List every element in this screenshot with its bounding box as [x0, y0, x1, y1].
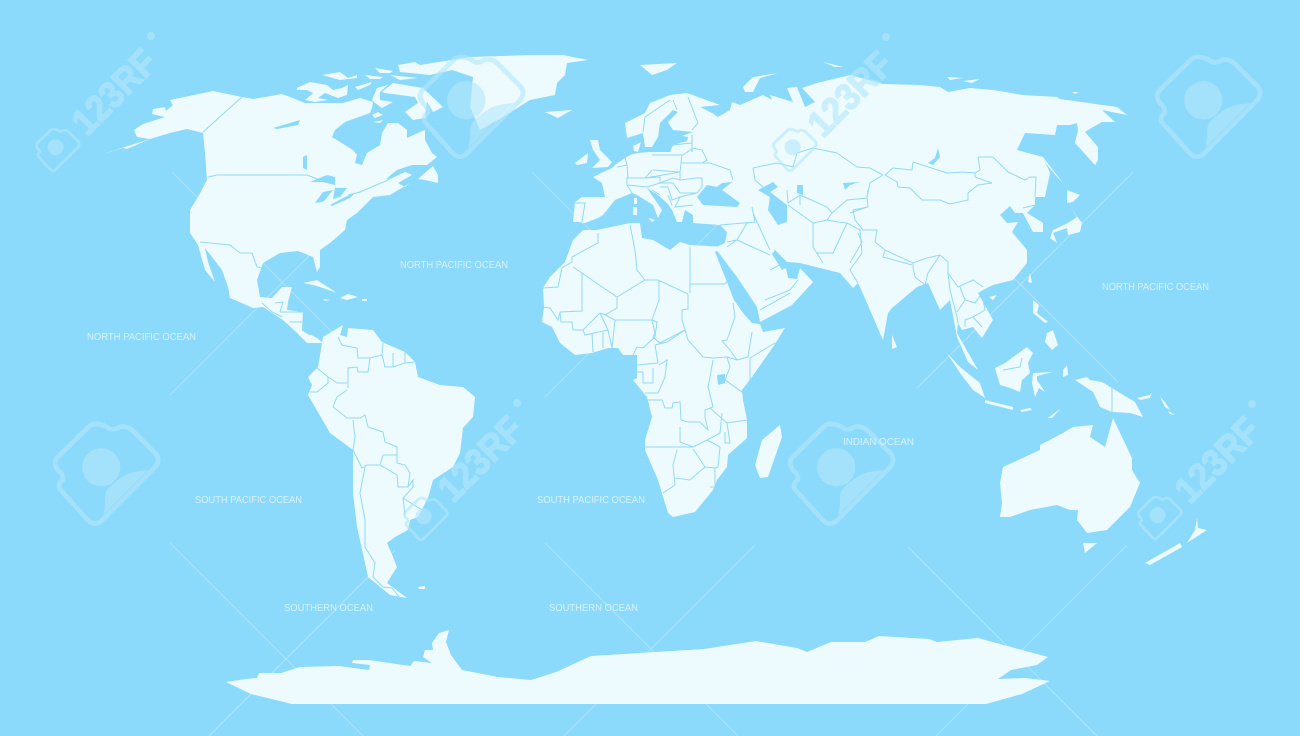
- label: south Atlantic: SOUTH PACIFIC OCEAN: [537, 494, 645, 506]
- Greenland: [398, 55, 588, 130]
- watermark logo: lower right: [1138, 400, 1268, 539]
- label: Southern Ocean west: SOUTHERN OCEAN: [284, 602, 373, 614]
- East Asian islands: [892, 157, 1082, 349]
- Caribbean: [303, 166, 438, 301]
- Africa: [542, 223, 785, 517]
- Madagascar: [755, 425, 782, 478]
- Southeast Asian islands: [947, 300, 1175, 418]
- watermark logo: lower centre-left: [404, 399, 531, 540]
- watermarks: [36, 32, 1268, 540]
- label: west Pacific: NORTH PACIFIC OCEAN: [87, 331, 196, 343]
- watermark stamp: top centre-left: [420, 57, 523, 157]
- borders: South and East Asia: [850, 157, 1036, 327]
- landmasses: [100, 55, 1207, 704]
- watermark logo: lower right: 123RF: [1167, 410, 1268, 511]
- borders: South America: [310, 337, 422, 598]
- borders: Borneo and New Guinea: [1003, 358, 1112, 412]
- country borders: [200, 97, 1112, 598]
- borders: North America: [200, 97, 388, 335]
- watermark logo: top centre-right: [773, 33, 901, 171]
- borders: Africa: [543, 225, 775, 493]
- Tasmania: [1083, 543, 1097, 553]
- label: Indian Ocean: INDIAN OCEAN: [843, 436, 914, 448]
- watermark logo: top left: 123RF: [64, 42, 165, 143]
- watermark stamp: lower left: [55, 424, 158, 524]
- watermark logo: top left: [36, 32, 165, 171]
- watermark logo: top centre-right: 123RF: [800, 44, 901, 145]
- borders: Middle East and Central Asia: [720, 148, 883, 310]
- New Zealand: [1145, 518, 1207, 565]
- inland seas and lakes: [273, 120, 940, 385]
- watermark stamp: lower centre: [790, 424, 893, 524]
- Antarctica: [226, 630, 1050, 704]
- label: Southern Ocean east: SOUTHERN OCEAN: [549, 602, 638, 614]
- North America: [100, 91, 437, 343]
- European and polar islands: [545, 62, 1079, 222]
- watermark stamp: top right: [1157, 57, 1260, 157]
- label: south Pacific: SOUTH PACIFIC OCEAN: [195, 494, 302, 506]
- Australia: [1000, 418, 1140, 533]
- South America: [308, 325, 475, 598]
- Eurasia: [573, 75, 1127, 370]
- label: east Pacific: NORTH PACIFIC OCEAN: [1102, 281, 1209, 293]
- borders: Europe: [575, 97, 733, 222]
- Arctic islands: [297, 68, 443, 123]
- ocean labels: [87, 259, 1209, 614]
- watermark logo: lower centre-left: 123RF: [430, 409, 531, 510]
- label: Atlantic: NORTH PACIFIC OCEAN: [400, 259, 508, 271]
